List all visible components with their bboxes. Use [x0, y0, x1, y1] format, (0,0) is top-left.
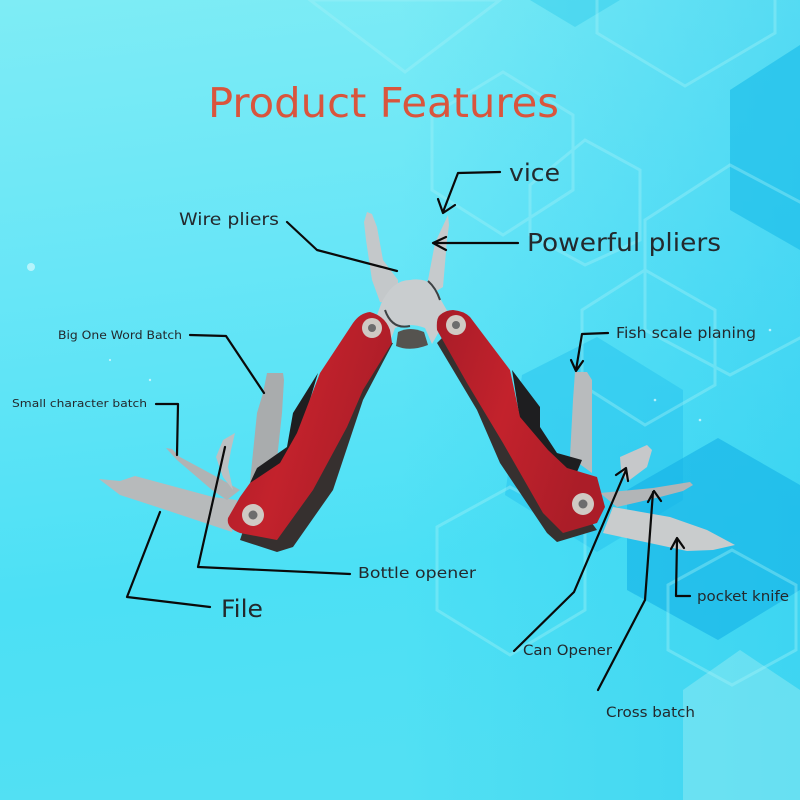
big one word bit	[250, 373, 284, 482]
right red handle	[437, 310, 605, 533]
callout: wire pliers: Wire pliers	[179, 210, 279, 230]
callout: pocket knife	[671, 538, 789, 605]
callout: pocket knife: pocket knife	[697, 589, 789, 605]
callout: powerful pliers: Powerful pliers	[527, 228, 721, 257]
pocket knife blade	[603, 507, 735, 551]
callout: fish scale planing	[571, 324, 756, 371]
left screws	[362, 318, 382, 338]
callout: fish scale planing: Fish scale planing	[616, 324, 756, 342]
file blade	[99, 476, 237, 532]
left handle underside	[240, 340, 393, 552]
powerful pliers jaw	[425, 215, 449, 298]
bottle opener	[216, 433, 235, 490]
wire pliers jaw	[364, 212, 398, 305]
can opener	[620, 445, 652, 482]
right black grip	[512, 370, 582, 472]
callout: small character batch	[12, 398, 178, 455]
callout: cross batch: Cross batch	[606, 705, 695, 721]
pivot spring	[396, 329, 428, 349]
fish scale blade	[570, 372, 592, 473]
callout: cross batch	[598, 491, 695, 721]
right screws	[446, 315, 466, 335]
callout: vice	[438, 159, 560, 213]
callout: bottle opener	[198, 447, 477, 582]
callout: big one word batch	[58, 328, 264, 393]
multi-tool illustration	[99, 212, 735, 552]
callout: powerful pliers	[433, 228, 721, 257]
left red handle	[228, 312, 392, 540]
callout: can opener: Can Opener	[523, 643, 612, 659]
callout: file: File	[221, 595, 263, 623]
plier head	[376, 279, 449, 344]
small character bit	[166, 448, 240, 500]
left black grip	[250, 373, 318, 483]
callout: big one word batch: Big One Word Batch	[58, 328, 182, 342]
callout: bottle opener: Bottle opener	[358, 564, 477, 582]
callout: vice: vice	[509, 159, 560, 187]
callout: file	[127, 512, 263, 623]
callout: wire pliers	[179, 210, 397, 271]
title: Product Features	[208, 79, 559, 127]
cross bit	[600, 482, 693, 507]
callout: small character batch: Small character batch	[12, 398, 147, 410]
right handle underside	[437, 320, 597, 542]
callout: can opener	[514, 468, 628, 659]
